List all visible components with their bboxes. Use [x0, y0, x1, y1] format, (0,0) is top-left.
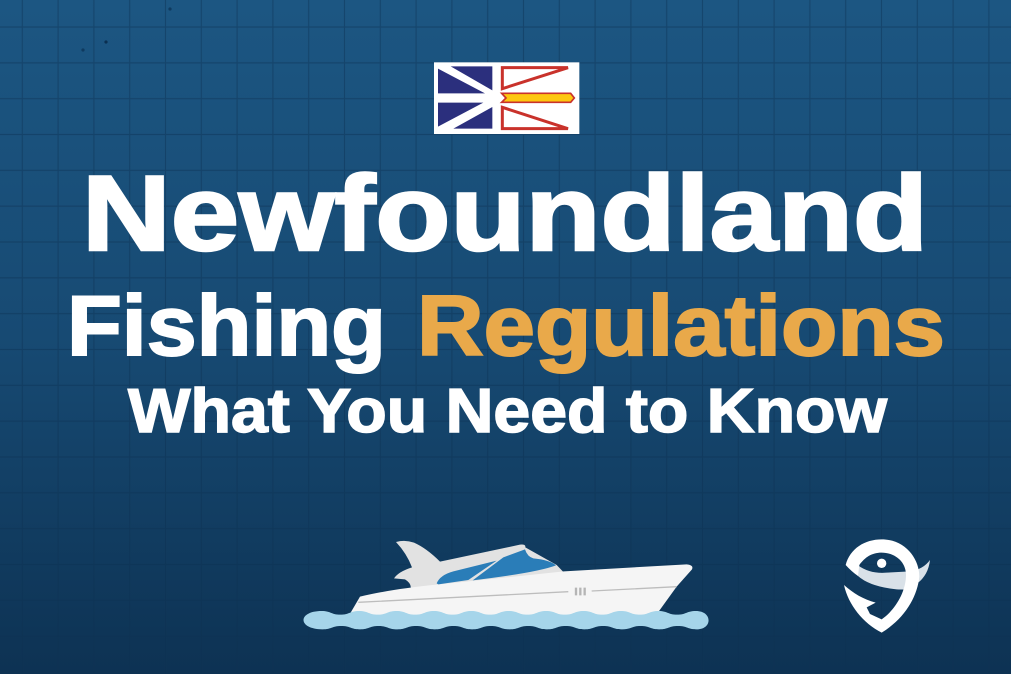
icon: Newfoundland flag [434, 62, 579, 134]
boat cabin and fin [394, 541, 564, 590]
logo body [844, 539, 919, 633]
heading word: Fishing: Fishing [67, 279, 386, 374]
hull stripe [358, 587, 677, 602]
icon: motor yacht on water [304, 541, 709, 629]
heading word: Regulations: Regulations [417, 279, 945, 374]
icon: fish hook logo [844, 539, 930, 633]
water waves [304, 611, 709, 629]
heading: Fishing Regulations [67, 279, 945, 374]
logo tail band [858, 560, 930, 590]
hull vents [576, 588, 585, 595]
logo eye [877, 559, 886, 568]
boat hull [348, 564, 692, 617]
subtitle: What You Need to Know [128, 377, 888, 446]
boat windows [437, 549, 556, 584]
title: Newfoundland: Newfoundland [82, 153, 928, 273]
